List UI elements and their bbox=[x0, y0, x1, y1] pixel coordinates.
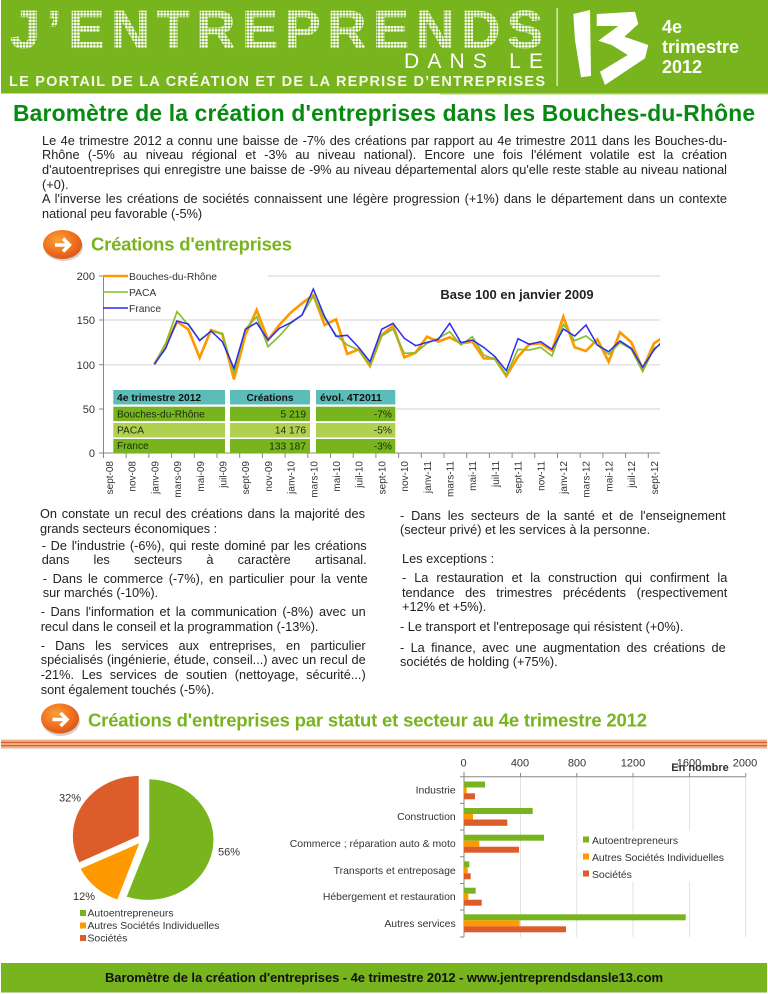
category labels: Transports et entreposage bbox=[334, 866, 456, 877]
heading: statut et secteur: Créations d'entreprises par statut et secteur au 4e trimestre 2012 bbox=[88, 710, 647, 730]
x axis labels: janv-11 bbox=[423, 461, 434, 494]
data table: France bbox=[117, 441, 149, 452]
chart legend bbox=[103, 272, 217, 315]
top axis labels: 2000 bbox=[733, 758, 757, 770]
x axis labels: juil-09 bbox=[218, 461, 230, 489]
x axis labels: sept-08 bbox=[105, 461, 116, 494]
intro text: d'autoentreprises qui enregistre une baisse de -9% au niveau départemental alors qu'elle reste stable au niveau national bbox=[42, 162, 727, 177]
x axis labels: mars-11 bbox=[446, 461, 456, 497]
axis unit: En nombre bbox=[671, 762, 729, 774]
left column: industrie: dans les secteurs à caractère artisanal. bbox=[42, 552, 367, 567]
right column: finance bbox=[400, 640, 726, 669]
data table: 4e trimestre 2012 bbox=[117, 393, 201, 404]
category labels: Hébergement et restauration bbox=[323, 892, 456, 903]
left column: services bbox=[41, 638, 366, 697]
data table: Créations bbox=[246, 393, 294, 404]
left column: information bbox=[41, 604, 366, 634]
left column: services: - Dans les services aux entreprises, en particulier bbox=[41, 638, 366, 653]
icon: arrow bullet 1 bbox=[43, 230, 83, 261]
line chart bbox=[77, 271, 665, 498]
top axis labels: 800 bbox=[568, 758, 586, 770]
data table: 5 219 bbox=[280, 410, 306, 420]
top axis labels: 0 bbox=[460, 758, 467, 770]
x axis labels: mai-09 bbox=[196, 461, 207, 492]
intro text: Le 4e trimestre 2012 a connu une baisse de -7% des créations par rapport au 4e trimestre 2011 dans les Bouches-du- bbox=[42, 133, 727, 148]
intro text: Rhône (-5% au niveau régional et -3% au niveau national). Encore une fois l'élément volatile est la création bbox=[42, 147, 727, 162]
x axis labels: sept-09 bbox=[241, 461, 252, 494]
left column: information: - Dans l'information et la communication (-8%) avec un bbox=[41, 604, 366, 619]
chart title: Base 100 en janvier 2009 bbox=[440, 287, 594, 302]
x axis labels: mai-10 bbox=[332, 461, 343, 492]
left column: commerce: - Dans le commerce (-7%), en particulier pour la vente bbox=[43, 571, 368, 586]
right column: exceptions heading: Les exceptions : bbox=[402, 551, 494, 566]
x axis labels: nov-08 bbox=[128, 461, 139, 492]
data table: évol. 4T2011 bbox=[320, 392, 382, 404]
data table: 14 176 bbox=[275, 426, 306, 436]
footer bar bbox=[1, 963, 767, 992]
left column: intro bbox=[40, 506, 365, 536]
pie legend: Sociétés bbox=[88, 934, 127, 944]
top axis labels bbox=[460, 758, 757, 770]
right column: finance: - La finance, avec une augmentation des créations de bbox=[400, 640, 726, 655]
y axis labels: 0 bbox=[89, 448, 95, 460]
chart legend: Bouches-du-Rhône bbox=[129, 272, 217, 283]
left column: intro: grands secteurs économiques : bbox=[40, 521, 217, 536]
intro text: A l'inverse les créations de sociétés connaissent une légère progression (+1%) dans le département dans un contexte bbox=[42, 191, 727, 206]
data table: PACA bbox=[117, 426, 144, 436]
right column: restauration bbox=[402, 570, 728, 614]
x axis labels: juil-11 bbox=[491, 461, 502, 488]
right column: santé bbox=[400, 508, 726, 537]
quarter label: 2012 bbox=[662, 57, 702, 77]
tagline: LE PORTAIL DE LA CRÉATION ET DE LA REPRISE D’ENTREPRISES bbox=[9, 73, 545, 90]
x axis labels: janv-09 bbox=[150, 461, 161, 495]
right column: restauration: - La restauration et la construction qui confirment la bbox=[402, 570, 727, 585]
footer bar: Baromètre de la création d'entreprises - 4e trimestre 2012 - www.jentreprendsdansle13.com bbox=[105, 970, 663, 985]
bar legend: Autoentrepreneurs bbox=[592, 836, 678, 847]
category labels: Construction bbox=[397, 812, 456, 823]
top axis labels: 1200 bbox=[621, 758, 645, 770]
top axis labels: 1600 bbox=[677, 758, 701, 770]
y axis labels: 150 bbox=[77, 315, 95, 327]
main title: Baromètre de la création d'entreprises dans les Bouches-du-Rhône bbox=[13, 100, 755, 126]
bar legend bbox=[583, 836, 724, 881]
data table: Bouches-du-Rhône bbox=[117, 410, 205, 420]
bar legend: Autres Sociétés Individuelles bbox=[592, 853, 724, 864]
left column: services: sont également touchés (-5%). bbox=[41, 682, 214, 697]
chart legend: France bbox=[129, 304, 161, 315]
heading: créations d'entreprises: Créations d'entreprises bbox=[91, 234, 292, 254]
y axis labels: 50 bbox=[83, 404, 95, 416]
right column: restauration: tendance des trimestres précédents (respectivement bbox=[402, 585, 727, 600]
data table: -7% bbox=[374, 410, 392, 420]
pie legend bbox=[80, 908, 220, 944]
pie legend: Autres Sociétés Individuelles bbox=[88, 921, 220, 932]
y axis labels: 100 bbox=[77, 360, 95, 372]
left column: intro: On constate un recul des créations dans la majorité des bbox=[40, 506, 365, 521]
x axis labels bbox=[105, 461, 661, 498]
logo title: J’ENTREPRENDS bbox=[10, 0, 543, 60]
x axis labels: sept-10 bbox=[377, 461, 388, 494]
pie legend: Autoentrepreneurs bbox=[88, 908, 174, 920]
section divider bbox=[1, 740, 767, 748]
left column: industrie: - De l'industrie (-6%), qui reste dominé par les créations bbox=[42, 538, 367, 553]
quarter label: 4e bbox=[662, 17, 682, 37]
x axis labels: mars-12 bbox=[582, 461, 593, 498]
x axis labels: nov-09 bbox=[264, 461, 275, 492]
intro text: national peu favorable (-5%) bbox=[42, 206, 202, 221]
x axis labels: mars-10 bbox=[309, 461, 320, 498]
pie labels: 32% bbox=[59, 792, 81, 804]
x axis labels: juil-12 bbox=[627, 461, 638, 489]
pie labels: 56% bbox=[218, 846, 240, 858]
category labels: Autres services bbox=[384, 919, 456, 930]
bars bbox=[464, 782, 686, 932]
y axis labels bbox=[77, 271, 95, 460]
logo number 13 bbox=[573, 10, 648, 85]
icon: arrow bullet 2 bbox=[41, 704, 80, 736]
right column: finance: sociétés de holding (+75%). bbox=[400, 654, 558, 669]
category labels: Industrie bbox=[416, 786, 456, 796]
top axis labels: 400 bbox=[511, 758, 529, 770]
logo subtitle: DANS LE bbox=[404, 50, 543, 73]
left column: commerce bbox=[43, 571, 368, 600]
right column: santé: (secteur privé) et les services à la personne. bbox=[400, 522, 650, 537]
x axis labels: janv-12 bbox=[559, 461, 570, 495]
data lines bbox=[154, 289, 665, 379]
x axis labels: mars-09 bbox=[173, 461, 184, 498]
right column: restauration: +12% et +5%). bbox=[402, 599, 486, 614]
left column: services: -21%. Les services de soutien (nettoyage, sécurité...) bbox=[41, 667, 366, 682]
quarter label: trimestre bbox=[662, 37, 739, 57]
chart legend: PACA bbox=[129, 288, 156, 299]
intro text bbox=[42, 133, 727, 221]
pie labels bbox=[59, 792, 240, 903]
pie chart bbox=[59, 776, 240, 944]
data table: -5% bbox=[374, 426, 392, 436]
x axis labels: nov-11 bbox=[536, 461, 547, 491]
data table bbox=[113, 390, 395, 453]
right column: transport: - Le transport et l'entreposage qui résistent (+0%). bbox=[400, 619, 683, 634]
x axis labels: janv-10 bbox=[287, 461, 298, 495]
x axis labels: mai-12 bbox=[604, 461, 615, 492]
x axis labels: nov-10 bbox=[400, 461, 411, 492]
pie labels: 12% bbox=[73, 891, 95, 903]
left column: commerce: sur marchés (-10%). bbox=[43, 585, 158, 600]
category labels: Commerce ; réparation auto & moto bbox=[290, 839, 456, 850]
header banner bbox=[1, 0, 768, 94]
bar legend: Sociétés bbox=[592, 870, 632, 881]
x axis labels: mai-11 bbox=[468, 461, 479, 491]
category labels bbox=[290, 786, 456, 930]
left column: industrie bbox=[42, 538, 367, 567]
y axis labels: 200 bbox=[77, 271, 95, 283]
right column: santé: - Dans les secteurs de la santé et de l'enseignement bbox=[400, 508, 726, 523]
data table: 133 187 bbox=[269, 442, 306, 452]
left column: information: recul dans le conseil et la programmation (-13%). bbox=[41, 619, 318, 634]
left column: services: spécialisés (ingénierie, étude, conseil...) avec un recul de bbox=[41, 652, 366, 667]
x axis labels: juil-10 bbox=[355, 461, 366, 489]
data table: -3% bbox=[374, 442, 392, 452]
bar chart bbox=[290, 758, 757, 937]
intro text: (+0). bbox=[42, 177, 69, 192]
x axis labels: sept-12 bbox=[650, 461, 661, 494]
x axis labels: sept-11 bbox=[514, 461, 525, 494]
